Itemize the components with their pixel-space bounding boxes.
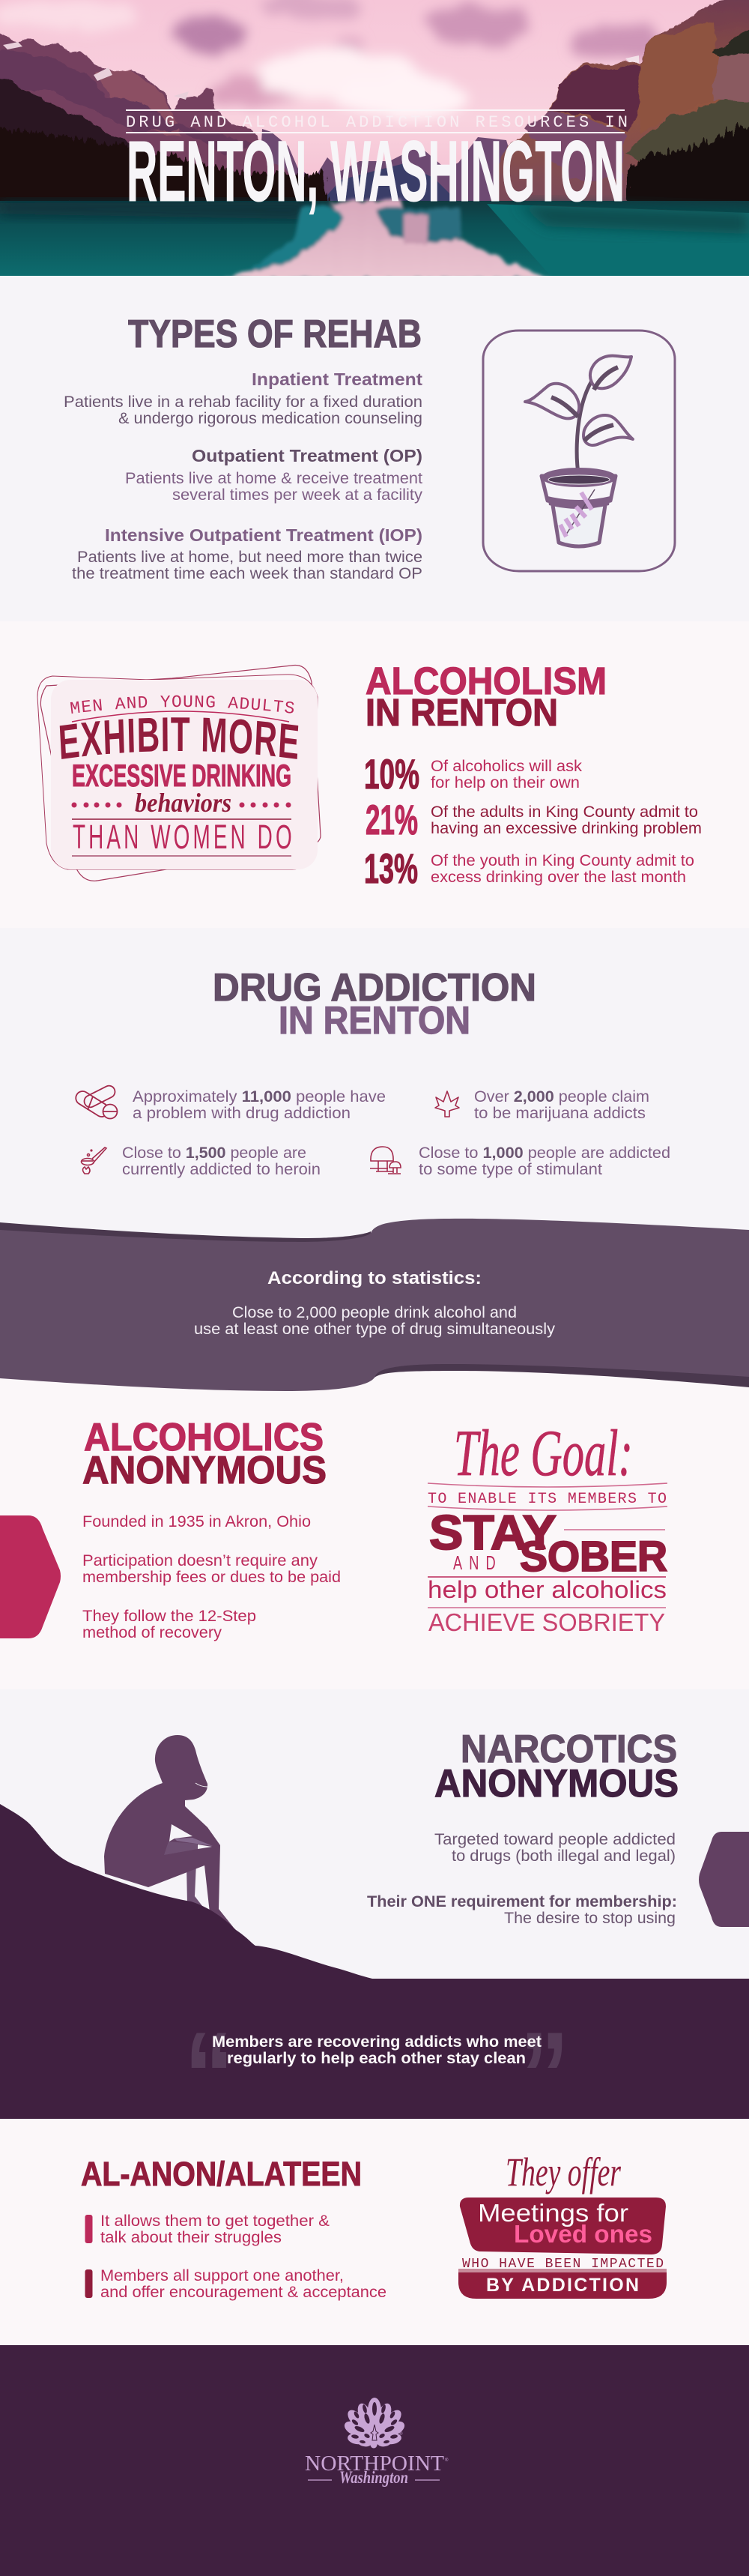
panel: alcoholics anonymous xyxy=(0,1416,667,1641)
card fill xyxy=(51,680,318,869)
heading: ANONYMOUS xyxy=(82,1449,327,1492)
body xyxy=(104,1735,234,1928)
page background: narcotics anonymous xyxy=(0,1689,749,1979)
heading xyxy=(82,1416,327,1492)
stat: 10%: for help on their own xyxy=(431,774,580,791)
back leg xyxy=(187,1862,207,1913)
stat: 11,000: Approximately 11,000 people have xyxy=(133,1088,386,1105)
heading xyxy=(434,1728,679,1806)
box light top xyxy=(458,2269,667,2272)
body xyxy=(194,1304,556,1338)
who have been impacted: WHO HAVE BEEN IMPACTED xyxy=(462,2257,664,2272)
quote: Members are recovering addicts who meet xyxy=(212,2033,542,2051)
side tab xyxy=(0,1515,61,1638)
page background: drug addiction xyxy=(0,928,749,1304)
sober: SOBER xyxy=(520,1533,667,1581)
logo rule left xyxy=(308,2479,332,2481)
panel: types of rehab xyxy=(64,313,675,582)
facts list: They follow the 12-Step xyxy=(82,1608,256,1625)
tilted frame second xyxy=(37,675,318,869)
tilted frame back xyxy=(40,665,321,881)
arch rule xyxy=(72,711,289,722)
outpatient heading: Outpatient Treatment (OP) xyxy=(192,446,422,465)
gap between arm and torso xyxy=(169,1824,192,1841)
callout: men and young adults xyxy=(37,664,321,881)
by addiction: BY ADDICTION xyxy=(486,2275,639,2296)
intensive outpatient text xyxy=(72,549,422,582)
inpatient text: & undergo rigorous medication counseling xyxy=(118,410,422,427)
hillside and dark band xyxy=(0,1804,749,2119)
heading: ALCOHOLICS xyxy=(84,1416,324,1459)
page background: types of rehab xyxy=(0,276,749,621)
stat: 10% xyxy=(364,750,583,797)
lake reflection xyxy=(221,201,551,279)
left forest xyxy=(0,127,330,206)
card outline xyxy=(483,331,675,571)
description xyxy=(434,1831,676,1865)
intensive outpatient text: the treatment time each week than standard OP xyxy=(72,565,422,582)
icon: mushrooms xyxy=(370,1147,401,1174)
quote mark open: “ xyxy=(184,2006,234,2144)
body: Close to 2,000 people drink alcohol and xyxy=(232,1304,517,1321)
registered mark on icon: ® xyxy=(399,2431,403,2437)
facts list xyxy=(82,1513,341,1641)
bullet text two: and offer encouragement & acceptance xyxy=(100,2284,386,2301)
logo script: Washington xyxy=(339,2468,408,2487)
stat: 21%: having an excessive drinking problem xyxy=(431,820,702,837)
rule xyxy=(564,1529,665,1530)
stat: 13% xyxy=(364,845,694,892)
dots right xyxy=(240,802,291,808)
page background: alcoholism xyxy=(0,621,749,928)
icon: spoon and flame xyxy=(81,1147,106,1174)
stat: 1,500: Close to 1,500 people are xyxy=(122,1144,306,1162)
achieve sobriety: ACHIEVE SOBRIETY xyxy=(428,1608,665,1636)
facts list: Participation doesn’t require any xyxy=(82,1552,318,1569)
side tab xyxy=(699,1832,749,1927)
quote xyxy=(212,2033,542,2067)
stat: 2,000: to be marijuana addicts xyxy=(474,1105,646,1122)
left mountains xyxy=(0,33,289,201)
sky xyxy=(0,0,724,175)
box bottom xyxy=(458,2272,667,2299)
panel: al-anon / alateen xyxy=(81,2150,667,2301)
rule xyxy=(72,855,291,857)
stat: 13%: Of the youth in King County admit to xyxy=(431,852,694,869)
intensive outpatient text: Patients live at home, but need more than twice xyxy=(77,549,422,566)
quote mark close: ” xyxy=(520,2006,569,2144)
icon: cannabis leaf xyxy=(435,1091,459,1117)
the goal: The Goal: xyxy=(454,1417,633,1490)
heading xyxy=(213,966,536,1043)
stat: 11,000: a problem with drug addiction xyxy=(133,1105,351,1122)
requirement: The desire to stop using xyxy=(504,1910,676,1927)
stat: 13%: 13% xyxy=(364,845,418,892)
inpatient text: Patients live in a rehab facility for a fixed duration xyxy=(64,393,422,411)
illustration: seated silhouette xyxy=(104,1735,234,1928)
heading: ANONYMOUS xyxy=(434,1762,679,1806)
stat: 1,000: to some type of stimulant xyxy=(419,1161,602,1178)
heading: IN RENTON xyxy=(366,691,558,734)
and: AND xyxy=(453,1552,496,1574)
logo rule right xyxy=(415,2479,440,2481)
behaviors: behaviors xyxy=(135,788,231,818)
heading: DRUG ADDICTION xyxy=(213,966,536,1010)
panel: according to statistics wave band xyxy=(0,1219,749,1391)
arched line text: MEN AND YOUNG ADULTS xyxy=(70,696,294,714)
panel: narcotics anonymous xyxy=(0,1728,749,2144)
wave shadow bottom xyxy=(374,1357,749,1387)
page background: alcoholics anonymous xyxy=(0,1304,749,1689)
heading: NARCOTICS xyxy=(461,1728,677,1771)
panel: alcoholism in renton xyxy=(37,660,702,892)
stay: STAY xyxy=(429,1505,557,1560)
gap at knee xyxy=(198,1844,212,1849)
snow xyxy=(3,42,22,49)
meetings for: Meetings for xyxy=(478,2199,628,2227)
stat: 10%: Of alcoholics will ask xyxy=(431,758,583,775)
bullet text two: Members all support one another, xyxy=(100,2267,344,2284)
header photo: mountain lake landscape xyxy=(0,0,749,279)
stat: 13%: excess drinking over the last month xyxy=(431,869,686,886)
smile xyxy=(195,1783,207,1787)
excessive drinking: EXCESSIVE DRINKING xyxy=(72,758,291,793)
curved rule xyxy=(428,1506,667,1510)
page background: al-anon xyxy=(0,2119,749,2345)
right forest xyxy=(626,122,749,201)
stat: 21%: Of the adults in King County admit to xyxy=(431,803,698,821)
subtitle rule bottom xyxy=(126,132,625,133)
than women do: THAN WOMEN DO xyxy=(73,818,292,856)
they offer lockup xyxy=(458,2150,667,2299)
distant central mountains xyxy=(258,129,524,201)
bullet text one xyxy=(100,2212,330,2246)
heading: According to statistics: xyxy=(267,1268,482,1288)
right cliffs xyxy=(487,0,749,206)
inpatient text xyxy=(64,393,422,427)
requirement: Their ONE requirement for membership: xyxy=(367,1893,677,1910)
logo wordmark: NORTHPOINT xyxy=(305,2452,444,2476)
dots left xyxy=(72,802,121,808)
bullet text two xyxy=(100,2267,386,2301)
inpatient heading: Inpatient Treatment xyxy=(252,369,422,389)
panel: drug addiction in renton xyxy=(73,966,670,1178)
stat: 1,500: currently addicted to heroin xyxy=(122,1161,321,1178)
stat: 2,000 xyxy=(474,1088,649,1122)
facts list: method of recovery xyxy=(82,1624,222,1641)
subtitle rule top xyxy=(126,109,625,111)
box xyxy=(460,2198,666,2254)
stat: 21% xyxy=(366,796,702,843)
wave band xyxy=(0,1219,749,1391)
goal typographic lockup xyxy=(428,1417,667,1636)
rule xyxy=(428,1576,666,1578)
forearm highlight xyxy=(175,1838,213,1846)
stat: 2,000: Over 2,000 people claim xyxy=(474,1088,649,1105)
logo: peacock lotus xyxy=(342,2398,407,2448)
outpatient text: several times per week at a facility xyxy=(172,486,423,504)
icon: pills xyxy=(73,1084,117,1119)
subtitle: DRUG AND ALCOHOL ADDICTION RESOURCES IN xyxy=(126,113,628,132)
facts list: Founded in 1935 in Akron, Ohio xyxy=(82,1513,311,1530)
centre dark forest xyxy=(304,168,330,201)
rule xyxy=(72,818,291,820)
exhibit more: EXHIBIT MORE xyxy=(60,717,298,759)
bullet text one: It allows them to get together & xyxy=(100,2212,330,2230)
heading: AL-ANON/ALATEEN xyxy=(81,2155,362,2193)
footer band xyxy=(0,2345,749,2576)
stat: 1,500 xyxy=(122,1144,321,1178)
wave shadow top xyxy=(0,1222,371,1244)
they offer: They offer xyxy=(506,2150,622,2195)
loved ones: Loved ones xyxy=(514,2220,652,2248)
facts list: membership fees or dues to be paid xyxy=(82,1569,341,1586)
to enable: TO ENABLE ITS MEMBERS TO xyxy=(428,1491,667,1508)
help other alcoholics: help other alcoholics xyxy=(428,1576,667,1603)
bullet bar one xyxy=(85,2215,93,2243)
icon: potted plant with stitches xyxy=(525,356,633,546)
bullet bar two xyxy=(85,2269,93,2298)
heading: TYPES OF REHAB xyxy=(128,313,422,356)
quote: regularly to help each other stay clean xyxy=(227,2050,526,2067)
heading xyxy=(366,660,607,734)
outpatient text: Patients live at home & receive treatment xyxy=(125,470,422,487)
description: to drugs (both illegal and legal) xyxy=(452,1847,676,1865)
clouds xyxy=(0,0,663,117)
body: use at least one other type of drug simultaneously xyxy=(194,1321,556,1338)
stat: 10%: 10% xyxy=(364,750,419,797)
thigh highlight xyxy=(164,1841,198,1855)
stat: 1,000 xyxy=(419,1144,670,1178)
stat: 21%: 21% xyxy=(366,796,418,843)
bullet text one: talk about their struggles xyxy=(100,2229,282,2246)
lake xyxy=(0,201,749,276)
curved rule xyxy=(428,1483,667,1487)
stat: 11,000 xyxy=(133,1088,386,1122)
description: Targeted toward people addicted xyxy=(434,1831,676,1848)
heading: IN RENTON xyxy=(279,999,470,1043)
heading: ALCOHOLISM xyxy=(366,660,607,702)
requirement xyxy=(367,1893,677,1927)
rule xyxy=(428,1607,666,1608)
intensive outpatient heading: Intensive Outpatient Treatment (IOP) xyxy=(105,525,422,545)
registered mark on wordmark: ® xyxy=(445,2458,449,2463)
stat: 1,000: Close to 1,000 people are addicted xyxy=(419,1144,670,1162)
outpatient text xyxy=(125,470,423,504)
